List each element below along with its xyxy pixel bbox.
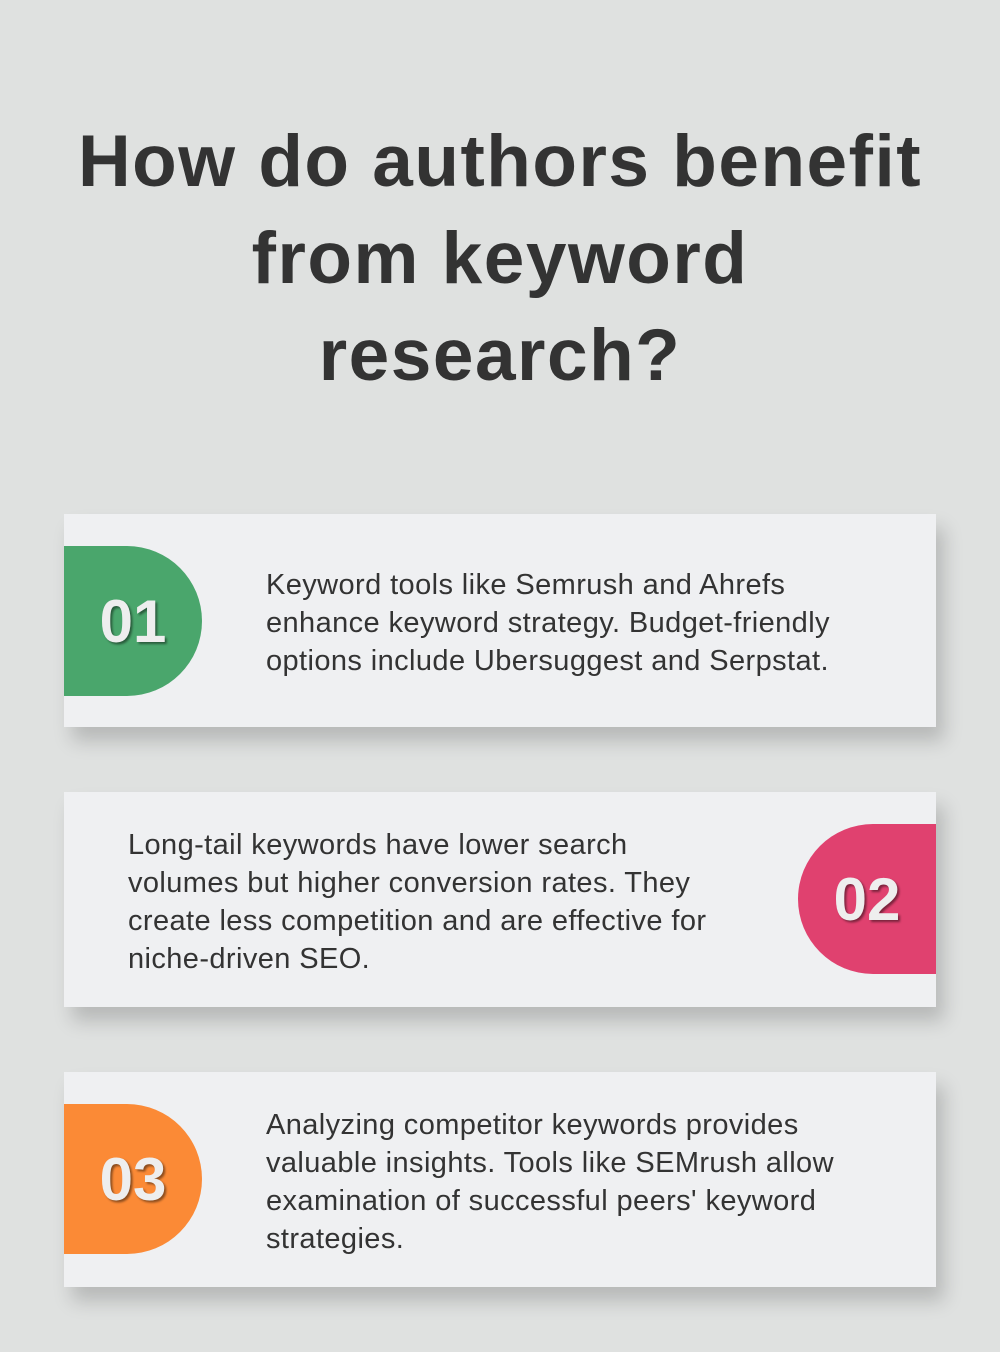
badge 02: [798, 824, 936, 974]
text 03: examination of successful peers' keyword: [266, 1185, 816, 1217]
text 01: [266, 569, 830, 677]
text 02: [128, 829, 706, 975]
text 01: Keyword tools like Semrush and Ahrefs: [266, 569, 785, 601]
badge 01: 01: [100, 588, 166, 654]
text 01: options include Ubersuggest and Serpstat.: [266, 645, 829, 677]
text 03: Analyzing competitor keywords provides: [266, 1109, 799, 1141]
text 02: Long-tail keywords have lower search: [128, 829, 628, 861]
badge 03: [64, 1104, 202, 1254]
text 03: strategies.: [266, 1223, 404, 1255]
title: How do authors benefit: [78, 121, 922, 202]
text 02: volumes but higher conversion rates. They: [128, 867, 690, 899]
title: research?: [319, 315, 681, 396]
text 02: niche-driven SEO.: [128, 943, 370, 975]
badge 03: 03: [100, 1146, 166, 1212]
title: [78, 121, 922, 396]
badge 01: [64, 546, 202, 696]
badge 02: 02: [834, 866, 900, 932]
panel: card 02: [64, 792, 936, 1007]
text 03: [266, 1109, 834, 1255]
panel: card 01: [64, 514, 936, 727]
panel: card 03: [64, 1072, 936, 1287]
title: from keyword: [252, 218, 748, 299]
text 01: enhance keyword strategy. Budget-friendly: [266, 607, 830, 639]
text 03: valuable insights. Tools like SEMrush allow: [266, 1147, 834, 1179]
text 02: create less competition and are effective for: [128, 905, 706, 937]
